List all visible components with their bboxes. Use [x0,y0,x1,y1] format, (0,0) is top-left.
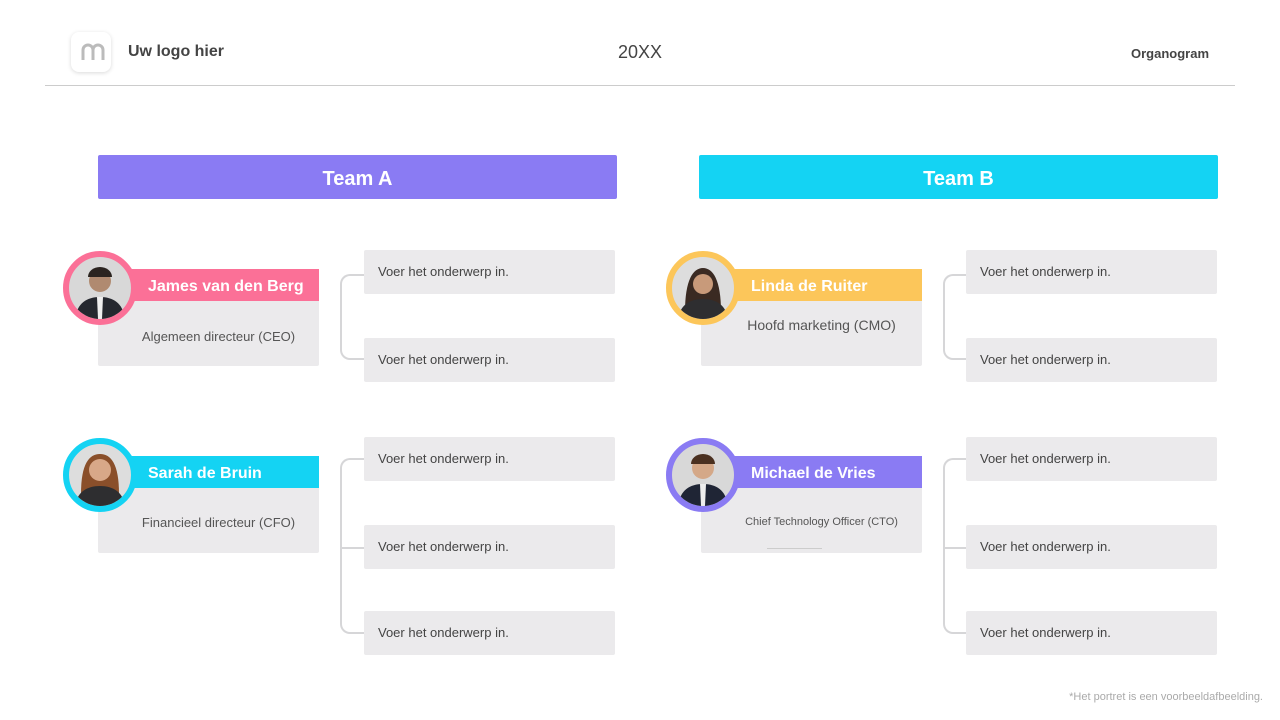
text: Voer het onderwerp in. [980,352,1111,367]
text: Voer het onderwerp in. [378,451,509,466]
card: James [98,269,319,366]
header: Team B [699,155,1218,199]
topic boxes Team B: Voer het onderwerp in. [980,264,1111,279]
logo text: Uw logo hier [128,43,224,60]
text: Voer het onderwerp in. [980,539,1111,554]
card: Sarah: Financieel directeur (CFO) [142,515,295,530]
page label: Organogram [1131,46,1209,61]
header: Team B: Team B [923,168,994,190]
text: Voer het onderwerp in. [378,352,509,367]
card: James: James van den Berg [148,278,304,295]
card: Michael: Chief Technology Officer (CTO) [745,516,898,528]
topic boxes Team A [364,250,615,294]
footnote: *Het portret is een voorbeeldafbeelding. [1069,691,1263,703]
header: Team A: Team A [322,168,393,190]
card: Michael [701,456,922,553]
avatars [63,251,137,325]
card: James: Algemeen directeur (CEO) [142,329,295,344]
connectors [340,274,364,360]
topic boxes Team A: Voer het onderwerp in. [378,264,509,279]
card: Linda: Hoofd marketing (CMO) [747,317,896,333]
card: Sarah [98,456,319,553]
topic boxes Team B [966,250,1217,294]
year: 20XX [618,42,662,62]
text: Voer het onderwerp in. [980,625,1111,640]
card: Michael: Michael de Vries [751,465,876,482]
card: Linda: Linda de Ruiter [751,278,867,295]
text: Voer het onderwerp in. [378,539,509,554]
card: Sarah: Sarah de Bruin [148,465,262,482]
text: Voer het onderwerp in. [980,451,1111,466]
logo [71,32,111,72]
card: Linda [701,269,922,366]
header: Team A [98,155,617,199]
text: Voer het onderwerp in. [378,625,509,640]
